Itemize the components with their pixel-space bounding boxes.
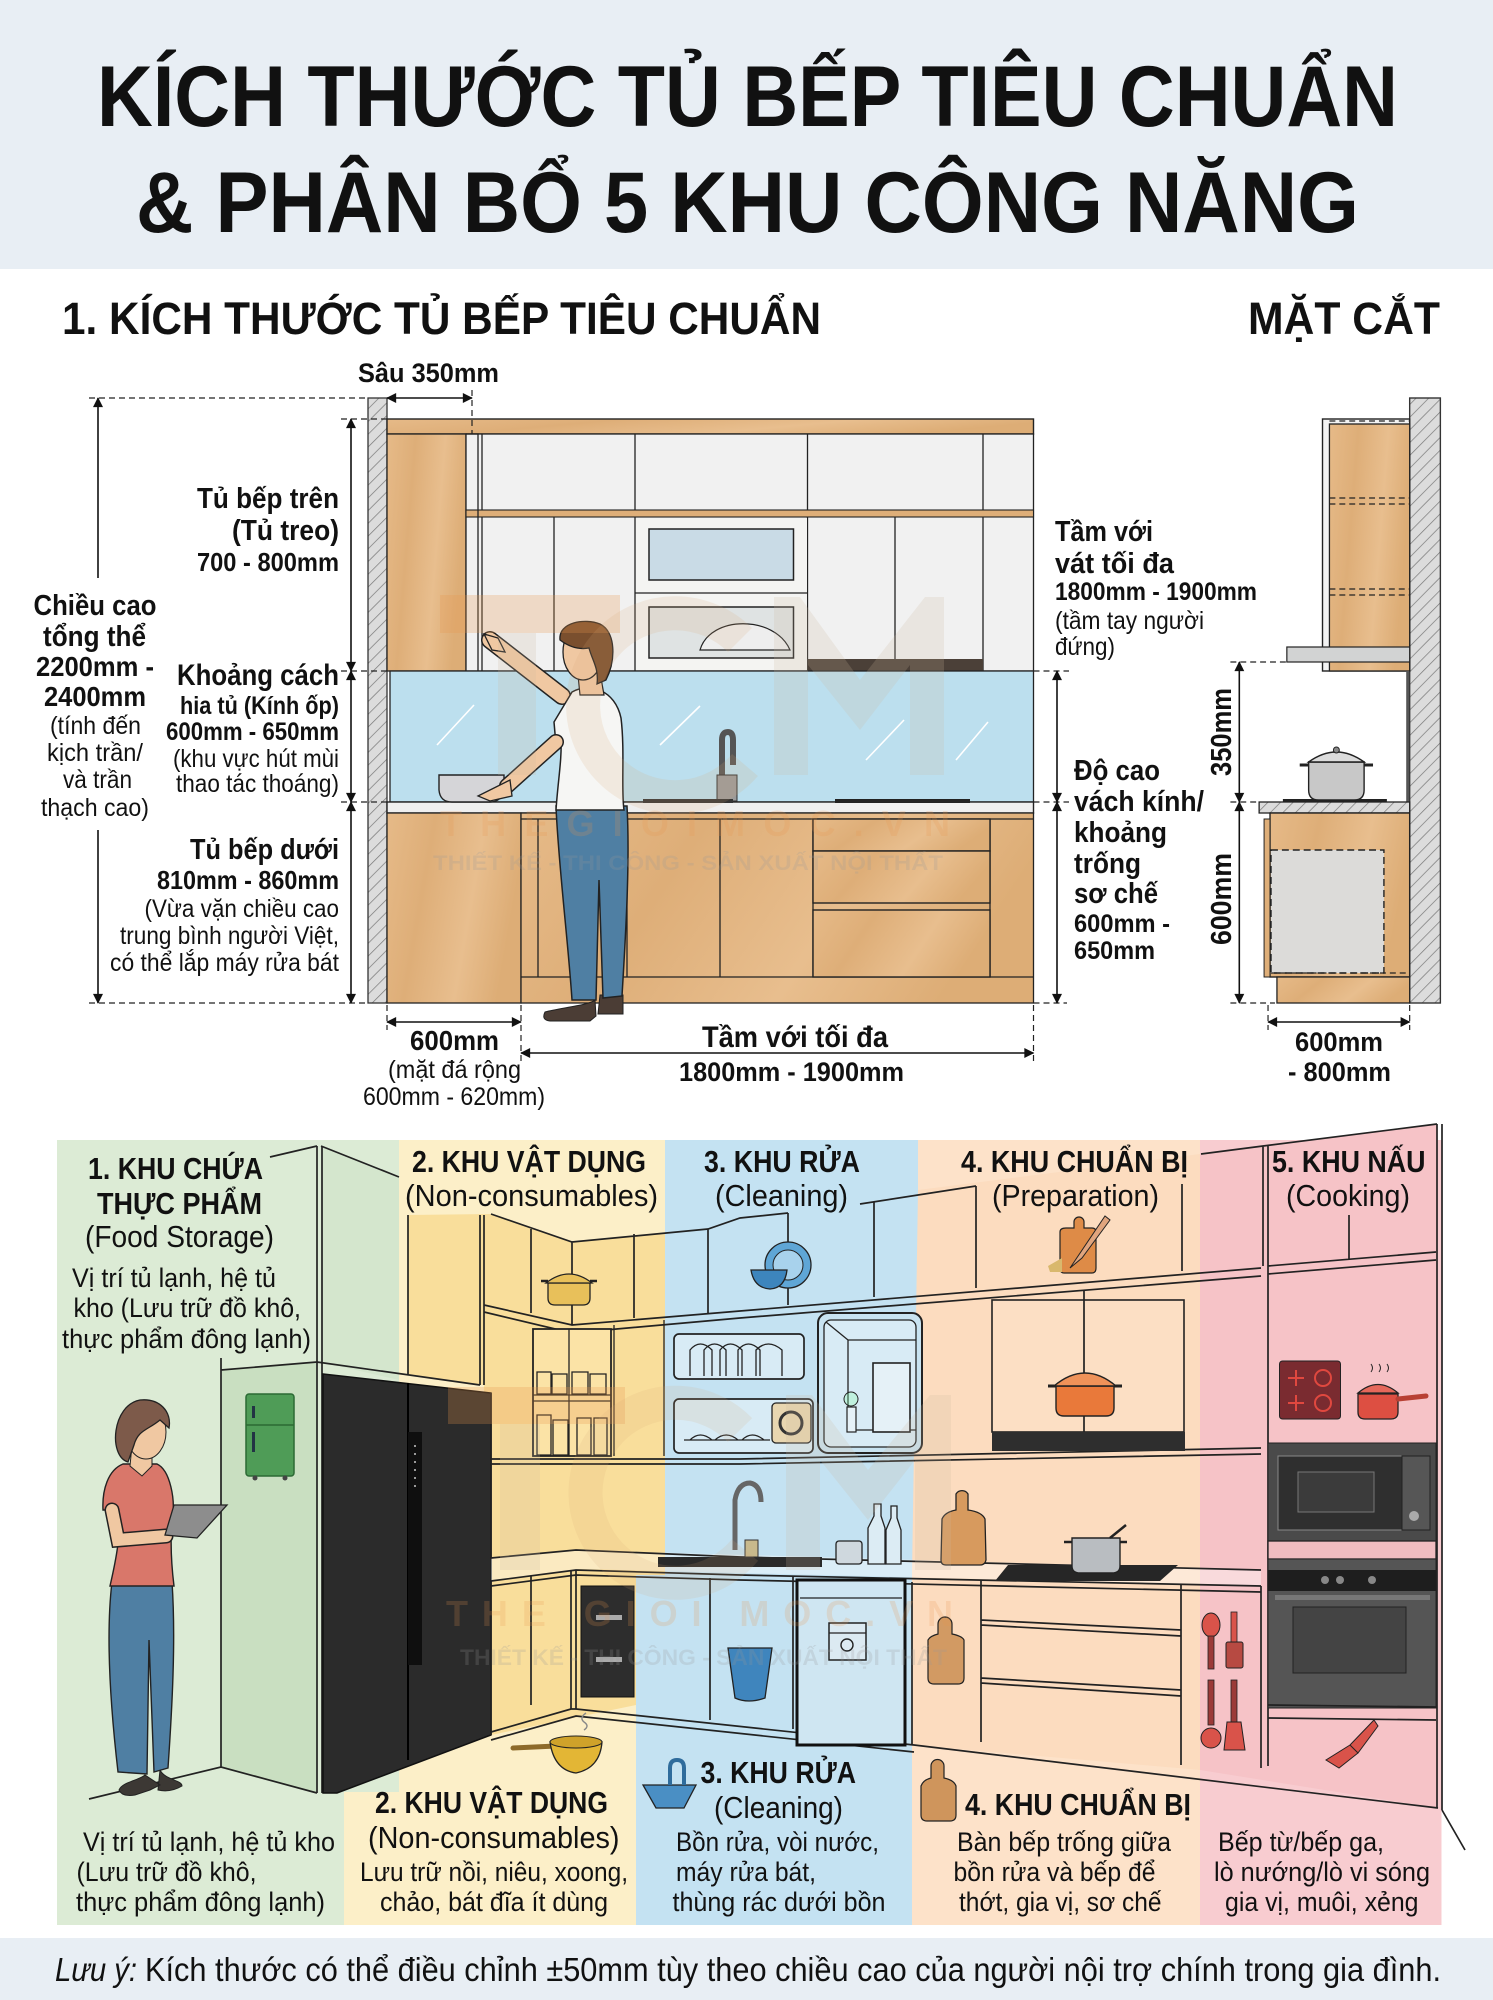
footer note: Lưu ý: bbox=[55, 1951, 137, 1988]
section heading: 1. KÍCH THƯỚC TỦ BẾP TIÊU CHUẨN bbox=[62, 293, 821, 344]
label: gap between cabinets bbox=[166, 659, 339, 798]
section upper cabinet bbox=[1287, 419, 1410, 671]
label: glass height bbox=[1074, 755, 1204, 965]
backsplash line bbox=[1406, 671, 1409, 802]
zone 1 top heading: THỰC PHẨM bbox=[97, 1186, 262, 1221]
label: 600mm rotated: 600mm bbox=[1206, 853, 1238, 945]
label: max reach height: vát tối đa bbox=[1055, 548, 1175, 580]
label: total height: (tính đến bbox=[50, 712, 141, 740]
label: section width: - 800mm bbox=[1288, 1057, 1391, 1087]
zone 5 lower text: gia vị, muôi, xẻng bbox=[1225, 1887, 1418, 1917]
label: glass height: Độ cao bbox=[1074, 755, 1160, 787]
label: upper cabinet: (Tủ treo) bbox=[232, 515, 339, 547]
base cabinets bbox=[387, 813, 1034, 1003]
zone 4 lower text: 4. KHU CHUẨN BỊ bbox=[965, 1787, 1191, 1822]
zone 1 top heading: (Food Storage) bbox=[85, 1219, 274, 1254]
dish racks bbox=[674, 1334, 813, 1453]
label: glass height: 600mm - bbox=[1074, 910, 1170, 938]
zone 3 lower text: máy rửa bát, bbox=[676, 1857, 816, 1887]
label: base cabinet: Tủ bếp dưới bbox=[190, 834, 339, 866]
zone 3 blue bbox=[636, 1140, 918, 1925]
label: 600mm depth: 600mm bbox=[410, 1025, 499, 1056]
cutting board on counter bbox=[941, 1491, 986, 1565]
zone 4 top heading bbox=[961, 1144, 1188, 1213]
label: gap between cabinets: thao tác thoáng) bbox=[176, 770, 339, 798]
orange cabinet tone bbox=[912, 1154, 1200, 1770]
zone 1 top heading: Vị trí tủ lạnh, hệ tủ bbox=[72, 1263, 276, 1293]
cabinet with hood bbox=[992, 1290, 1185, 1451]
label: glass height: khoảng bbox=[1074, 817, 1167, 849]
bowl, faucet, sink and hob bbox=[439, 732, 970, 803]
zone 3 top heading bbox=[704, 1143, 860, 1213]
woman with tablet bbox=[103, 1400, 227, 1795]
section counter bbox=[1259, 802, 1410, 813]
header band bbox=[0, 0, 1493, 269]
wall cabinet outlines bbox=[408, 1124, 1465, 1850]
person reaching bbox=[478, 621, 628, 1021]
icon: utensils bbox=[1201, 1612, 1245, 1750]
section wall bbox=[1410, 398, 1440, 1003]
label: total height: thạch cao) bbox=[41, 794, 149, 822]
label: base cabinet: có thể lắp máy rửa bát bbox=[110, 948, 339, 977]
icon: trash bin bbox=[728, 1648, 772, 1701]
zone 1 top heading: 1. KHU CHỨA bbox=[88, 1150, 263, 1186]
zone 5 lower text: lò nướng/lò vi sóng bbox=[1214, 1857, 1430, 1887]
icon: board and knife bbox=[1048, 1216, 1110, 1273]
zone 2 lower text: 2. KHU VẬT DỤNG bbox=[375, 1784, 608, 1820]
label: max reach height bbox=[1055, 516, 1257, 661]
label: section width bbox=[1288, 1027, 1391, 1087]
label: glass height: vách kính/ bbox=[1074, 786, 1204, 818]
label: upper cabinet bbox=[197, 483, 339, 577]
label: upper cabinet: 700 - 800mm bbox=[197, 547, 339, 577]
tall column and storage wall bbox=[89, 1146, 480, 1799]
title: & PHÂN BỔ 5 KHU CÔNG NĂNG bbox=[136, 155, 1359, 251]
hob and pot bbox=[995, 1525, 1178, 1581]
zone 1 lower text bbox=[76, 1827, 335, 1917]
label: gap between cabinets: (khu vực hút mùi bbox=[173, 745, 339, 773]
zone 4 orange bbox=[912, 1140, 1200, 1925]
zone 5 lower text bbox=[1214, 1827, 1430, 1917]
section base cabinet bbox=[1264, 813, 1410, 1003]
zone 2 lower text bbox=[360, 1784, 628, 1917]
label: total height: tổng thể bbox=[43, 621, 146, 653]
zone 4 lower text: bồn rửa và bếp để bbox=[954, 1857, 1156, 1887]
zones panel bbox=[57, 1124, 1442, 1925]
total height arrow bbox=[97, 398, 99, 1003]
watermark lower: THE GIOI MOC.VN bbox=[446, 1593, 953, 1634]
icon: mini fridge bbox=[246, 1394, 294, 1480]
faucet and sink bbox=[658, 1483, 822, 1567]
watermark upper: THEGIOIMOC.VN bbox=[440, 803, 950, 844]
zone 2 yellow bbox=[344, 1140, 665, 1925]
label: 350mm rotated: 350mm bbox=[1206, 688, 1238, 776]
refrigerator bbox=[323, 1374, 491, 1793]
icon: red saucepan bbox=[1358, 1364, 1426, 1419]
label: total height: Chiều cao bbox=[34, 590, 156, 622]
label: 600mm depth: 600mm - 620mm) bbox=[363, 1083, 545, 1111]
front elevation drawing bbox=[368, 398, 1034, 1021]
label: max reach height: đứng) bbox=[1055, 633, 1115, 661]
label: max reach height: 1800mm - 1900mm bbox=[1055, 578, 1257, 606]
zone 2 top heading: 2. KHU VẬT DỤNG bbox=[412, 1143, 646, 1179]
depth arrow bbox=[387, 397, 472, 399]
zone 1 top heading: thực phẩm đông lạnh) bbox=[62, 1324, 311, 1354]
zone 1 lower text: (Lưu trữ đồ khô, bbox=[76, 1857, 256, 1887]
glass cabinet bbox=[818, 1313, 922, 1453]
zone 5 top heading: 5. KHU NẤU bbox=[1272, 1144, 1426, 1179]
label: base cabinet: 810mm - 860mm bbox=[157, 865, 339, 895]
watermark upper: THIẾT KẾ - THI CÔNG - SẢN XUẤT NỘI THẤT bbox=[433, 851, 943, 875]
zone 3 top heading: 3. KHU RỬA bbox=[704, 1143, 860, 1179]
bottom arrows bbox=[387, 1022, 1034, 1053]
label: depth 350: Sâu 350mm bbox=[358, 358, 499, 388]
icon: induction cooktop bbox=[1280, 1361, 1340, 1419]
label: gap between cabinets: hia tủ (Kính ốp) bbox=[180, 692, 339, 720]
label: max reach width bbox=[679, 1021, 904, 1087]
zone 2 lower text: chảo, bát đĩa ít dùng bbox=[380, 1887, 608, 1917]
section dimension arrows bbox=[1230, 662, 1410, 1030]
icon: frying pan bbox=[513, 1713, 602, 1773]
upper cabinets bbox=[387, 419, 1034, 671]
zone 1 top heading bbox=[62, 1150, 311, 1354]
pink cabinet tone bbox=[1200, 1124, 1437, 1808]
label: upper cabinet: Tủ bếp trên bbox=[197, 483, 339, 515]
yellow cabinet tone bbox=[408, 1214, 665, 1735]
zone 5 pink bbox=[1200, 1140, 1442, 1925]
dimension lines front bbox=[89, 390, 1069, 1062]
label: gap between cabinets: Khoảng cách bbox=[177, 659, 339, 692]
countertop bbox=[387, 802, 1034, 813]
watermark lower: THIẾT KẾ - THI CÔNG - SẢN XUẤT NỘI THẤT bbox=[460, 1645, 948, 1670]
label: gap between cabinets: 600mm - 650mm bbox=[166, 718, 339, 746]
icon: dishes bbox=[751, 1242, 811, 1289]
label: max reach height: (tầm tay người bbox=[1055, 607, 1204, 635]
zone 2 top heading: (Non-consumables) bbox=[405, 1178, 658, 1213]
label: glass height: trống bbox=[1074, 848, 1141, 880]
tower built-in oven bbox=[1268, 1541, 1436, 1720]
icon: orange pot bbox=[1048, 1373, 1122, 1416]
label: base cabinet: (Vừa vặn chiều cao bbox=[144, 895, 339, 923]
bottles and appliance bbox=[836, 1504, 901, 1564]
title bbox=[97, 49, 1398, 251]
zone 3 top heading: (Cleaning) bbox=[715, 1178, 848, 1213]
zone 2 top heading bbox=[405, 1143, 658, 1213]
zone 4 lower text bbox=[954, 1787, 1191, 1917]
lower tools spatula bbox=[1326, 1720, 1378, 1768]
label: total height: kịch trần/ bbox=[47, 739, 143, 767]
zone 1 lower text: thực phẩm đông lạnh) bbox=[76, 1887, 325, 1917]
label: max reach width: 1800mm - 1900mm bbox=[679, 1057, 904, 1087]
base cabinet outlines bbox=[491, 1570, 1438, 1808]
label: total height bbox=[34, 590, 156, 822]
zone 3 lower text: thùng rác dưới bồn bbox=[672, 1887, 886, 1917]
icon: bottom cutting board bbox=[921, 1760, 956, 1821]
zone 4 lower text: thớt, gia vị, sơ chế bbox=[959, 1887, 1162, 1917]
label: section width: 600mm bbox=[1295, 1027, 1383, 1057]
zone 5 lower text: Bếp từ/bếp ga, bbox=[1218, 1827, 1384, 1857]
section view drawing bbox=[1230, 398, 1440, 1030]
footer note bbox=[0, 1938, 1493, 2000]
zone 2 lower text: Lưu trữ nồi, niêu, xoong, bbox=[360, 1857, 628, 1887]
tower microwave bbox=[1268, 1443, 1436, 1541]
left stacked arrows bbox=[350, 419, 352, 1003]
kitchen line art bbox=[89, 1124, 1465, 1850]
zone 5 top heading: (Cooking) bbox=[1286, 1178, 1410, 1213]
zone 3 lower text: (Cleaning) bbox=[714, 1790, 843, 1825]
zone 3 lower text bbox=[672, 1754, 886, 1917]
zone 4 top heading: 4. KHU CHUẨN BỊ bbox=[961, 1144, 1188, 1179]
icon: basin bbox=[643, 1760, 696, 1808]
corner pantry shelf bbox=[533, 1320, 664, 1456]
label: total height: 2400mm bbox=[44, 681, 146, 712]
label: 600mm depth bbox=[363, 1025, 545, 1111]
dishwasher bbox=[797, 1580, 905, 1745]
zone 2 lower text: (Non-consumables) bbox=[368, 1820, 620, 1855]
right stacked arrows bbox=[1056, 671, 1058, 1003]
pot on hob bbox=[1283, 747, 1387, 803]
watermark lower bbox=[446, 1387, 953, 1670]
zone 3 lower text: 3. KHU RỬA bbox=[700, 1754, 856, 1790]
section view heading: MẶT CẮT bbox=[1248, 293, 1440, 344]
label: base cabinet: trung bình người Việt, bbox=[120, 922, 339, 950]
icon: yellow pot bbox=[541, 1274, 597, 1305]
label: base cabinet bbox=[110, 834, 339, 977]
label: 600mm depth: (mặt đá rộng bbox=[388, 1056, 521, 1084]
label: glass height: 650mm bbox=[1074, 937, 1155, 965]
glass backsplash bbox=[390, 671, 1034, 802]
label: total height: 2200mm - bbox=[36, 651, 154, 682]
label: max reach width: Tầm với tối đa bbox=[702, 1021, 888, 1054]
label: total height: và trần bbox=[63, 766, 132, 794]
label: glass height: sơ chế bbox=[1074, 878, 1159, 910]
zone 4 lower text: Bàn bếp trống giữa bbox=[957, 1827, 1172, 1857]
zone 1 lower text: Vị trí tủ lạnh, hệ tủ kho bbox=[83, 1827, 335, 1857]
zone 3 lower text: Bồn rửa, vòi nước, bbox=[676, 1827, 879, 1857]
wall hatch bbox=[368, 398, 387, 1003]
zone 1 green bbox=[57, 1140, 399, 1925]
watermark upper bbox=[433, 595, 950, 875]
icon: small board bbox=[928, 1617, 964, 1684]
zone 5 top heading bbox=[1272, 1144, 1426, 1213]
zone 4 top heading: (Preparation) bbox=[992, 1178, 1159, 1213]
zone 1 top heading: kho (Lưu trữ đồ khô, bbox=[74, 1293, 301, 1323]
worktop bbox=[491, 1550, 1261, 1592]
label: max reach height: Tầm với bbox=[1055, 516, 1153, 548]
